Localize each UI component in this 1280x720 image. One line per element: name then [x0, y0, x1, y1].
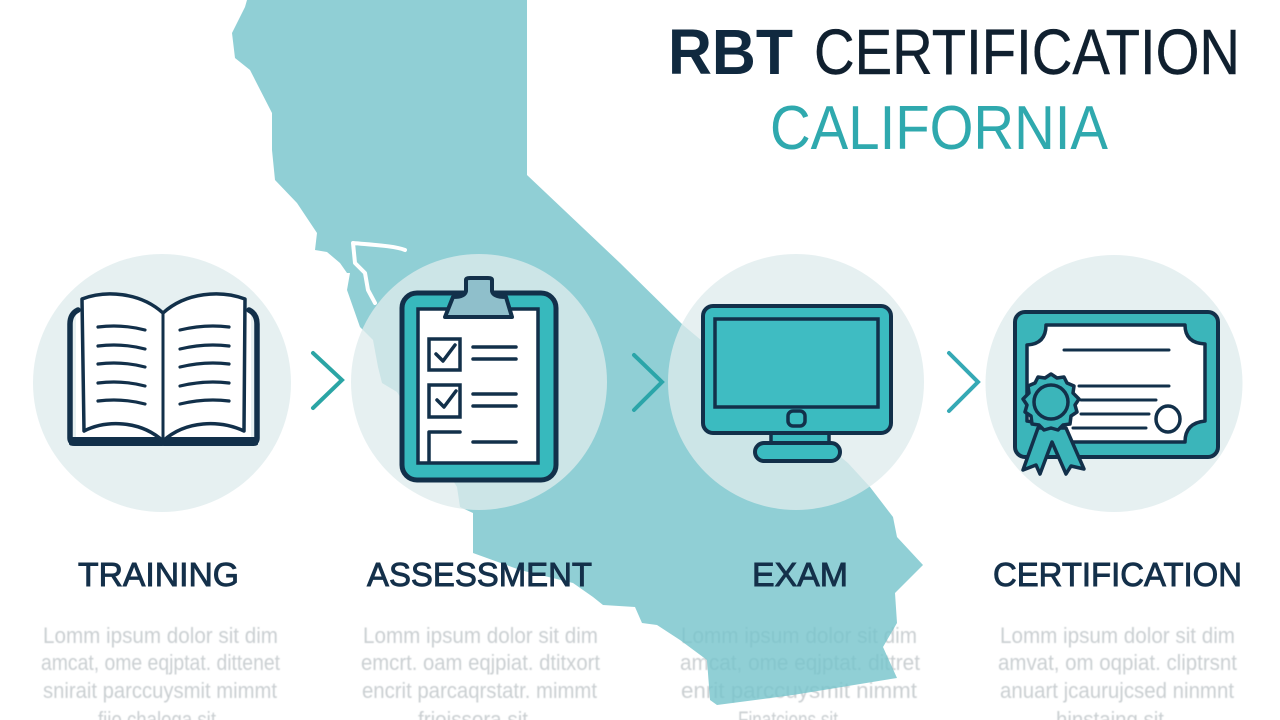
arrow: assessment to exam [634, 355, 662, 410]
body text: exam [680, 623, 920, 720]
heading: training: TRAINING [78, 556, 239, 593]
title: CALIFORNIA [770, 94, 1109, 163]
arrow: training to assessment [313, 353, 342, 408]
body text: exam: Lomm ipsum dolor sit dim [681, 623, 917, 648]
body text: certification: amvat, om oqpiat. cliptrsnt [998, 650, 1237, 675]
heading: certification: CERTIFICATION [993, 556, 1242, 593]
title: RBT [668, 16, 793, 88]
body text: exam: enrit parccuysmit nimmt [681, 678, 917, 703]
icon: clipboard [402, 278, 556, 480]
panel: training step [33, 254, 291, 720]
body text: training [41, 623, 280, 720]
icon circle: certification [986, 255, 1242, 512]
title [668, 16, 1240, 163]
body text: assessment: emcrt. oam eqjpiat. dtitxort [361, 650, 600, 675]
body text: assessment: Lomm ipsum dolor sit dim [363, 623, 598, 648]
panel: assessment step [351, 254, 607, 720]
map: California silhouette [232, 0, 923, 705]
panel: exam step [668, 254, 924, 593]
arrow: exam to certification [949, 353, 978, 411]
icon circle: training [33, 254, 291, 512]
body text: certification: anuart jcaurujcsed ninmnt [1000, 678, 1234, 703]
heading: exam: EXAM [752, 556, 848, 593]
panel: certification step [986, 255, 1242, 720]
icon: open book [69, 294, 258, 446]
body text: assessment [361, 623, 600, 720]
body text: certification: Lomm ipsum dolor sit dim [1000, 623, 1235, 648]
body text: training: snirait parccuysmit mimmt [43, 678, 277, 703]
body text: training: Lomm ipsum dolor sit dim [43, 623, 278, 648]
body text: exam: amcat, ome eqjptat. dittret [680, 650, 920, 675]
body text: assessment: encrit parcaqrstatr. mimmt [362, 678, 597, 703]
icon: monitor [703, 306, 891, 461]
icon circle: assessment [351, 254, 607, 510]
heading: assessment: ASSESSMENT [367, 556, 592, 593]
body text: certification [998, 623, 1237, 720]
icon: certificate [1015, 312, 1218, 474]
body text: training: amcat, ome eqjptat. dittenet [41, 650, 280, 675]
icon circle: exam [668, 254, 924, 510]
